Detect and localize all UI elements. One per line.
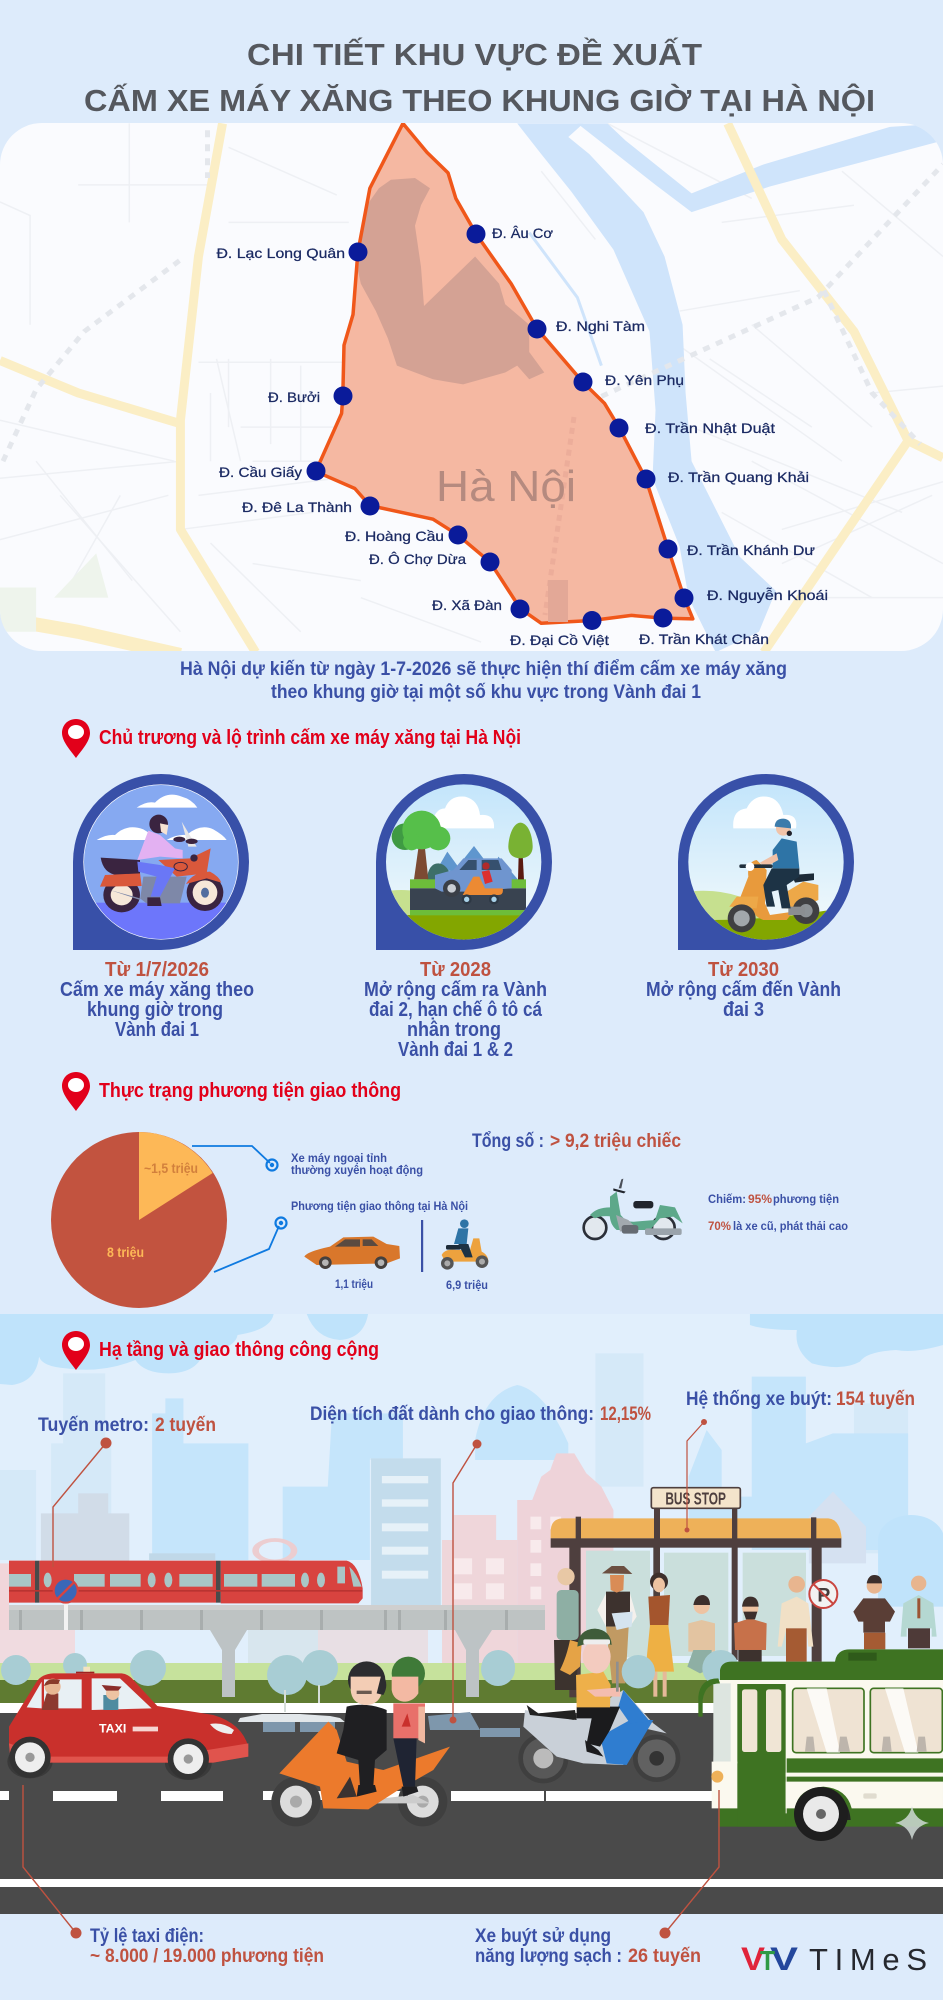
logo: VTV Times: V (741, 1941, 766, 1977)
callout: electric taxi share (23, 1785, 324, 1967)
text: 2030 milestone: đai 3 (723, 999, 764, 1021)
callout: clean energy buses (475, 1790, 719, 1967)
route dots (306, 224, 694, 630)
sky and skyline (0, 1314, 943, 1663)
taxi: TAXI (99, 1721, 126, 1735)
page bottom band (0, 1914, 943, 2000)
heading: vehicle status: Thực trạng phương tiện giao thông (99, 1080, 401, 1102)
street labels: Đ. Ô Chợ Dừa (369, 551, 466, 567)
logo: VTV Times: V (770, 1941, 799, 1977)
logo: VTV Times: TIMeS (809, 1942, 927, 1977)
lake in zone (355, 178, 544, 384)
sparkle (895, 1806, 929, 1840)
panel: city infrastructure scene (0, 1314, 943, 1914)
title: CẤM XE MÁY XĂNG THEO KHUNG GIỜ TẠI HÀ NỘI (84, 82, 875, 118)
taxi (7, 1667, 248, 1780)
text: 2028 milestone: Mở rộng cấm ra Vành (364, 979, 547, 1001)
callout: electric taxi share: ~ 8.000 / 19.000 phương tiện (90, 1946, 324, 1967)
icon: small scooter (441, 1219, 488, 1270)
intro text: Hà Nội dự kiến từ ngày 1-7-2026 sẽ thực hiện thí điểm cấm xe máy xăng (180, 659, 787, 680)
icon: location pin 2 (62, 1072, 90, 1111)
intro text: theo khung giờ tại một số khu vực trong Vành đai 1 (271, 682, 701, 703)
street labels: Đ. Trần Quang Khải (668, 469, 809, 485)
sign: bus stop: BUS STOP (665, 1489, 726, 1509)
place name: Hà Nội: Hà Nội (436, 462, 576, 511)
main roads (0, 123, 943, 655)
text: 2028 milestone: Vành đai 1 & 2 (398, 1039, 513, 1061)
pie chart (51, 1132, 227, 1308)
street labels: Đ. Hoàng Cầu (345, 528, 444, 544)
text: 2030 milestone: Mở rộng cấm đến Vành (646, 979, 841, 1001)
stat: total vehicles: Tổng số : (472, 1131, 544, 1152)
street labels: Đ. Lạc Long Quân (216, 245, 345, 261)
callout: metro lines: 2 tuyến (155, 1415, 216, 1436)
panel: roadmap 2028 (364, 774, 552, 1061)
text: 2026 milestone: khung giờ trong (87, 999, 223, 1021)
callout: vehicles in Hanoi: 1,1 triệu (335, 1279, 373, 1291)
text: 2028 milestone: Từ 2028 (420, 959, 491, 981)
text: motorbike share: 95% (748, 1192, 772, 1206)
icon: badge scooter rider (678, 774, 854, 950)
callout: out-of-city motorbikes: Xe máy ngoại tỉnh (291, 1151, 387, 1165)
decorative central rail (545, 417, 574, 615)
sign: bus stop (651, 1488, 740, 1509)
title: CHI TIẾT KHU VỰC ĐỀ XUẤT (247, 37, 702, 72)
logo: VTV Times (741, 1941, 927, 1977)
panel: roadmap 2030 (646, 774, 854, 1021)
text: 2028 milestone: nhân trong (407, 1019, 501, 1041)
panel: map of restricted zone (0, 123, 943, 655)
restricted zone polygon (316, 123, 693, 623)
street labels: Đ. Âu Cơ (492, 225, 553, 241)
stat: total vehicles: > 9,2 triệu chiếc (550, 1131, 681, 1152)
bus stop shelter with people (482, 1488, 937, 1697)
callout: metro lines: Tuyến metro: (38, 1415, 149, 1436)
street labels: Đ. Nghi Tàm (556, 318, 645, 334)
heading: policy and roadmap: Chủ trương và lộ trình cấm xe máy xăng tại Hà Nội (99, 727, 521, 749)
text: 2026 milestone (60, 959, 254, 1041)
icon: location pin 3 (62, 1331, 90, 1370)
metro train (9, 1561, 363, 1630)
green bus (698, 1649, 943, 1827)
callout: metro lines (38, 1415, 216, 1567)
text: motorbike share: phương tiện (773, 1192, 839, 1206)
text: 2026 milestone: Từ 1/7/2026 (105, 959, 209, 981)
green patch (0, 553, 108, 632)
street labels: Đ. Trần Khánh Dư (687, 542, 815, 558)
bus wheel (794, 1787, 848, 1841)
callout: vehicles in Hanoi (214, 1199, 488, 1292)
sign: no parking (809, 1580, 837, 1608)
street labels: Đ. Xã Đàn (432, 597, 502, 613)
text: motorbike share: Chiếm: (708, 1192, 746, 1206)
text: 2026 milestone: Vành đai 1 (115, 1019, 199, 1041)
street labels: Đ. Trần Khát Chân (639, 631, 769, 647)
callout: bus system: 154 tuyến (836, 1389, 915, 1410)
heading: infrastructure and public transport: Hạ tầng và giao thông công cộng (99, 1339, 379, 1361)
callout: bus system (684, 1389, 915, 1532)
street labels: Đ. Yên Phụ (605, 372, 684, 388)
callout: out-of-city motorbikes (192, 1146, 423, 1177)
logo: VTV Times: T (760, 1945, 775, 1976)
callout: bus system: Hệ thống xe buýt: (686, 1389, 832, 1410)
callout: land for transport (310, 1404, 651, 1724)
rail lines (3, 130, 943, 461)
text: motorbike share: là xe cũ, phát thải cao (733, 1219, 848, 1233)
elevated rail bridge (9, 1605, 545, 1697)
icon: orange car (304, 1237, 400, 1269)
callout: land for transport: 12,15% (600, 1404, 651, 1425)
icon: location pin 1 (62, 719, 90, 758)
icon: badge motorcycle rider (73, 774, 249, 950)
callout: electric taxi share: Tỷ lệ taxi điện: (90, 1926, 204, 1947)
motorbike with two riders (271, 1657, 450, 1826)
callout: clean energy buses: 26 tuyến (628, 1946, 701, 1967)
panel: roadmap 2026 (60, 774, 254, 1041)
icon: badge car and scooter (376, 774, 552, 950)
text: 2030 milestone (646, 959, 841, 1021)
street labels: Đ. Nguyễn Khoái (707, 587, 828, 603)
passengers (554, 1566, 937, 1697)
stat: total vehicles (472, 1131, 681, 1152)
street labels: Đ. Cầu Giấy (219, 464, 302, 480)
title (84, 37, 875, 118)
river (517, 123, 776, 652)
text: 2030 milestone: Từ 2030 (708, 959, 779, 981)
text: 2026 milestone: Cấm xe máy xăng theo (60, 979, 254, 1001)
motorbike with woman rider (521, 1629, 678, 1781)
text: motorbike share (708, 1192, 848, 1233)
callout: vehicles in Hanoi: 6,9 triệu (446, 1280, 488, 1292)
clouds (0, 1314, 943, 1385)
tower with stripes (371, 1458, 441, 1610)
pink buildings (442, 1515, 517, 1677)
callout: vehicles in Hanoi: Phương tiện giao thông tại Hà Nội (291, 1199, 468, 1213)
callout: clean energy buses: Xe buýt sử dụng (475, 1926, 611, 1947)
street labels: Đ. Đê La Thành (242, 499, 352, 515)
street labels: Đ. Bưởi (268, 389, 320, 405)
street labels: Đ. Đại Cồ Việt (510, 632, 609, 648)
text: 2028 milestone (364, 959, 547, 1061)
callout: out-of-city motorbikes: thường xuyên hoạt động (291, 1163, 423, 1177)
text: motorbike share: 70% (708, 1219, 731, 1233)
callout: clean energy buses: năng lượng sạch : (475, 1946, 622, 1967)
street labels (216, 225, 828, 648)
icon: green moped (584, 1179, 683, 1239)
intro text (180, 659, 787, 703)
road (0, 1712, 943, 1914)
grass band (0, 1663, 714, 1713)
pie chart: ~1,5 triệu (144, 1160, 198, 1176)
sign: no parking: P (817, 1585, 830, 1606)
callout: land for transport: Diện tích đất dành cho giao thông: (310, 1404, 594, 1425)
trees (1, 1650, 515, 1712)
text: 2028 milestone: đai 2, hạn chế ô tô cá (369, 999, 543, 1021)
pie chart: 8 triệu (107, 1244, 144, 1260)
street labels: Đ. Trần Nhật Duật (645, 420, 775, 436)
